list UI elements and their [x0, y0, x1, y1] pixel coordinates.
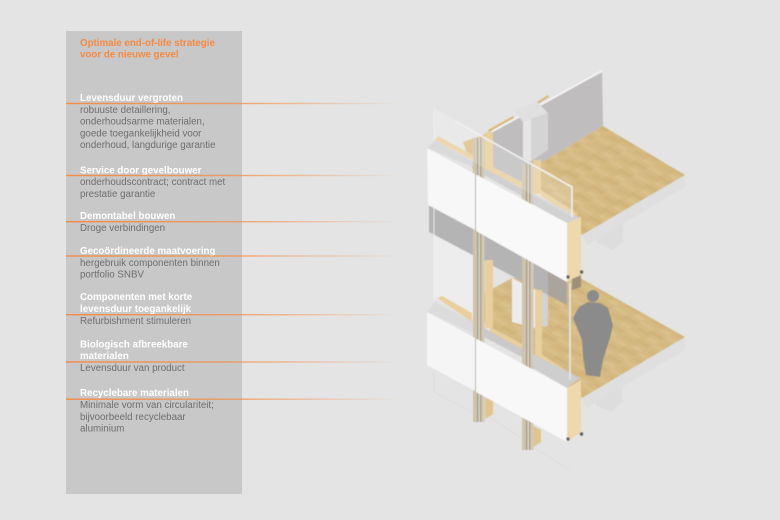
upper floor slab [582, 175, 685, 245]
upper concrete column [513, 102, 548, 162]
item: Gecoördineerde maatvoering [80, 246, 220, 281]
item: Levensduur vergroten: Levensduur vergroten [80, 93, 183, 104]
upper facade cap [427, 140, 580, 224]
item: Biologisch afbreekbare materialen: materialen [80, 351, 129, 362]
item: Componenten met korte levensduur toegankelijk: Componenten met korte [80, 292, 193, 303]
back wall [493, 70, 603, 190]
item: Service door gevelbouwer: prestatie garantie [80, 189, 155, 200]
lower window timber frame [437, 260, 568, 376]
item: Gecoördineerde maatvoering: hergebruik componenten binnen [80, 258, 220, 269]
lower floor beam [596, 380, 622, 412]
lower left opening [434, 232, 473, 318]
item: Recyclebare materialen: Recyclebare materialen [80, 388, 189, 399]
lower end timber [567, 380, 581, 442]
item: Levensduur vergroten [80, 93, 216, 151]
item: Levensduur vergroten: onderhoudsarme materialen, [80, 117, 205, 128]
title: voor de nieuwe gevel [80, 50, 179, 60]
ghost of lower storey [434, 373, 570, 470]
item: Componenten met korte levensduur toegankelijk: levensduur toegankelijk [80, 304, 192, 315]
upper floor deck [541, 126, 685, 235]
lower facade panels [427, 312, 567, 442]
timber wall edge strips [488, 95, 549, 132]
steel bracket [572, 275, 581, 290]
facade panel seams [474, 174, 476, 392]
lower timber stubs [485, 397, 541, 447]
panel: strategy list [66, 31, 242, 494]
item: Demontabel bouwen: Demontabel bouwen [80, 211, 175, 222]
lower floor slab [582, 337, 685, 408]
upper facade panels [427, 148, 567, 282]
item: Biologisch afbreekbare materialen [80, 340, 188, 374]
item: Levensduur vergroten: robuuste detaillering, [80, 105, 171, 116]
lower concrete column [512, 278, 548, 328]
item: Recyclebare materialen: aluminium [80, 423, 124, 434]
upper window timber frame [434, 132, 578, 218]
item: Service door gevelbouwer [80, 165, 226, 200]
bolts [566, 270, 583, 441]
glass balustrade [434, 108, 572, 380]
mullions [473, 138, 534, 450]
item: Levensduur vergroten: onderhoud, langdurige garantie [80, 140, 216, 151]
item: Gecoördineerde maatvoering: Gecoördineerde maatvoering [80, 246, 216, 257]
item: Componenten met korte levensduur toegankelijk: Refurbishment stimuleren [80, 316, 191, 327]
orange leader lines [66, 103, 400, 400]
grey spandrel band [429, 203, 567, 305]
item: Demontabel bouwen: Droge verbindingen [80, 223, 165, 234]
lower floor deck [463, 278, 685, 398]
item: Biologisch afbreekbare materialen: Biologisch afbreekbare [80, 340, 188, 350]
item: Levensduur vergroten: goede toegankelijkheid voor [80, 128, 202, 139]
item: Gecoördineerde maatvoering: portfolio SNBV [80, 270, 144, 281]
person silhouette [573, 290, 613, 377]
facade section illustration [427, 70, 685, 470]
upper end timber [567, 217, 581, 282]
item: Service door gevelbouwer: onderhoudscontract; contract met [80, 177, 226, 188]
item: Recyclebare materialen: Minimale vorm van circulariteit; [80, 400, 214, 411]
lower facade cap [427, 302, 580, 388]
item: Recyclebare materialen [80, 388, 214, 434]
item: Recyclebare materialen: bijvoorbeeld recyclebaar [80, 412, 186, 423]
item: Service door gevelbouwer: Service door gevelbouwer [80, 165, 202, 176]
item: Componenten met korte levensduur toegankelijk [80, 292, 193, 327]
upper floor beam [597, 222, 623, 250]
item: Biologisch afbreekbare materialen: Levensduur van product [80, 363, 185, 374]
title [80, 38, 215, 60]
title: Optimale end-of-life strategie [80, 38, 215, 49]
item: Demontabel bouwen [80, 211, 175, 234]
